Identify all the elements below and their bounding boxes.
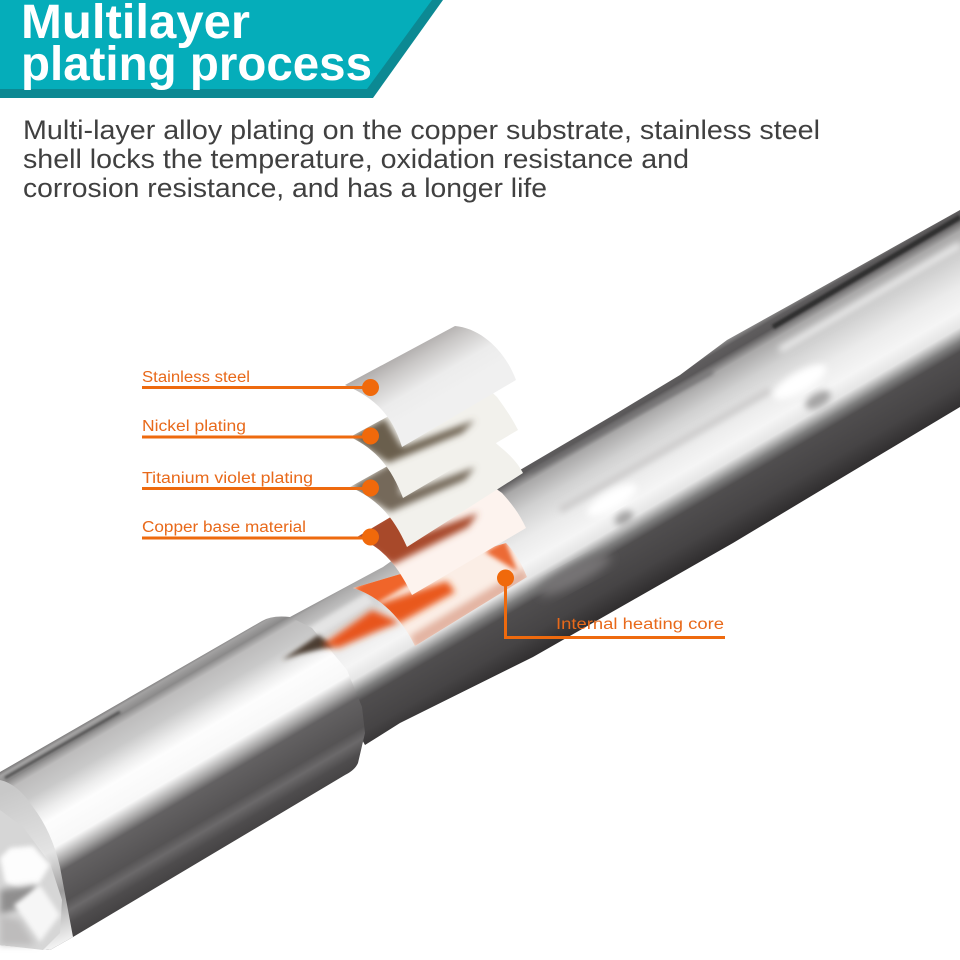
tube: dark slit near cut-away [282, 635, 334, 660]
description text: shell locks the temperature, oxidation resistance and [23, 144, 689, 174]
layer: copper base sheet [358, 490, 526, 595]
layer: titanium violet sheet [350, 443, 523, 547]
peeled plating layers [345, 326, 527, 646]
description text: corrosion resistance, and has a longer life [23, 173, 547, 203]
tube: copper showing through the cut-away [322, 610, 400, 648]
layer: stainless steel sheet [345, 326, 516, 447]
tube: tip end rim [0, 780, 73, 950]
label: stainless steel [142, 369, 379, 396]
title banner [0, 0, 443, 98]
label: internal heating core [497, 570, 725, 638]
label: copper base material: Copper base material [142, 519, 306, 536]
soldering tip tube [0, 210, 960, 950]
layer: internal heating core sheet [353, 543, 527, 646]
label: titanium violet plating [142, 470, 379, 496]
description text: Multi-layer alloy plating on the copper substrate, stainless steel [23, 115, 820, 145]
layer: nickel sheet [353, 394, 518, 498]
label: titanium violet plating: Titanium violet plating [142, 470, 313, 487]
tube: tip nut facets [0, 846, 60, 945]
banner dark edge [0, 0, 443, 98]
label: copper base material [142, 519, 379, 546]
label: internal heating core: Internal heating core [556, 616, 724, 633]
tube: tip nut inner [0, 810, 62, 950]
label: nickel plating: Nickel plating [142, 418, 246, 435]
tube: front section [0, 616, 365, 950]
label: nickel plating [142, 418, 379, 444]
label: stainless steel: Stainless steel [142, 369, 250, 386]
banner fill [0, 0, 432, 89]
description text [23, 115, 820, 203]
tube: sharp dark groove [5, 712, 120, 778]
title text: plating process [21, 38, 372, 91]
tube: middle and rear section [290, 210, 960, 745]
tube: streaks and dents [300, 217, 960, 640]
title text [21, 0, 372, 91]
